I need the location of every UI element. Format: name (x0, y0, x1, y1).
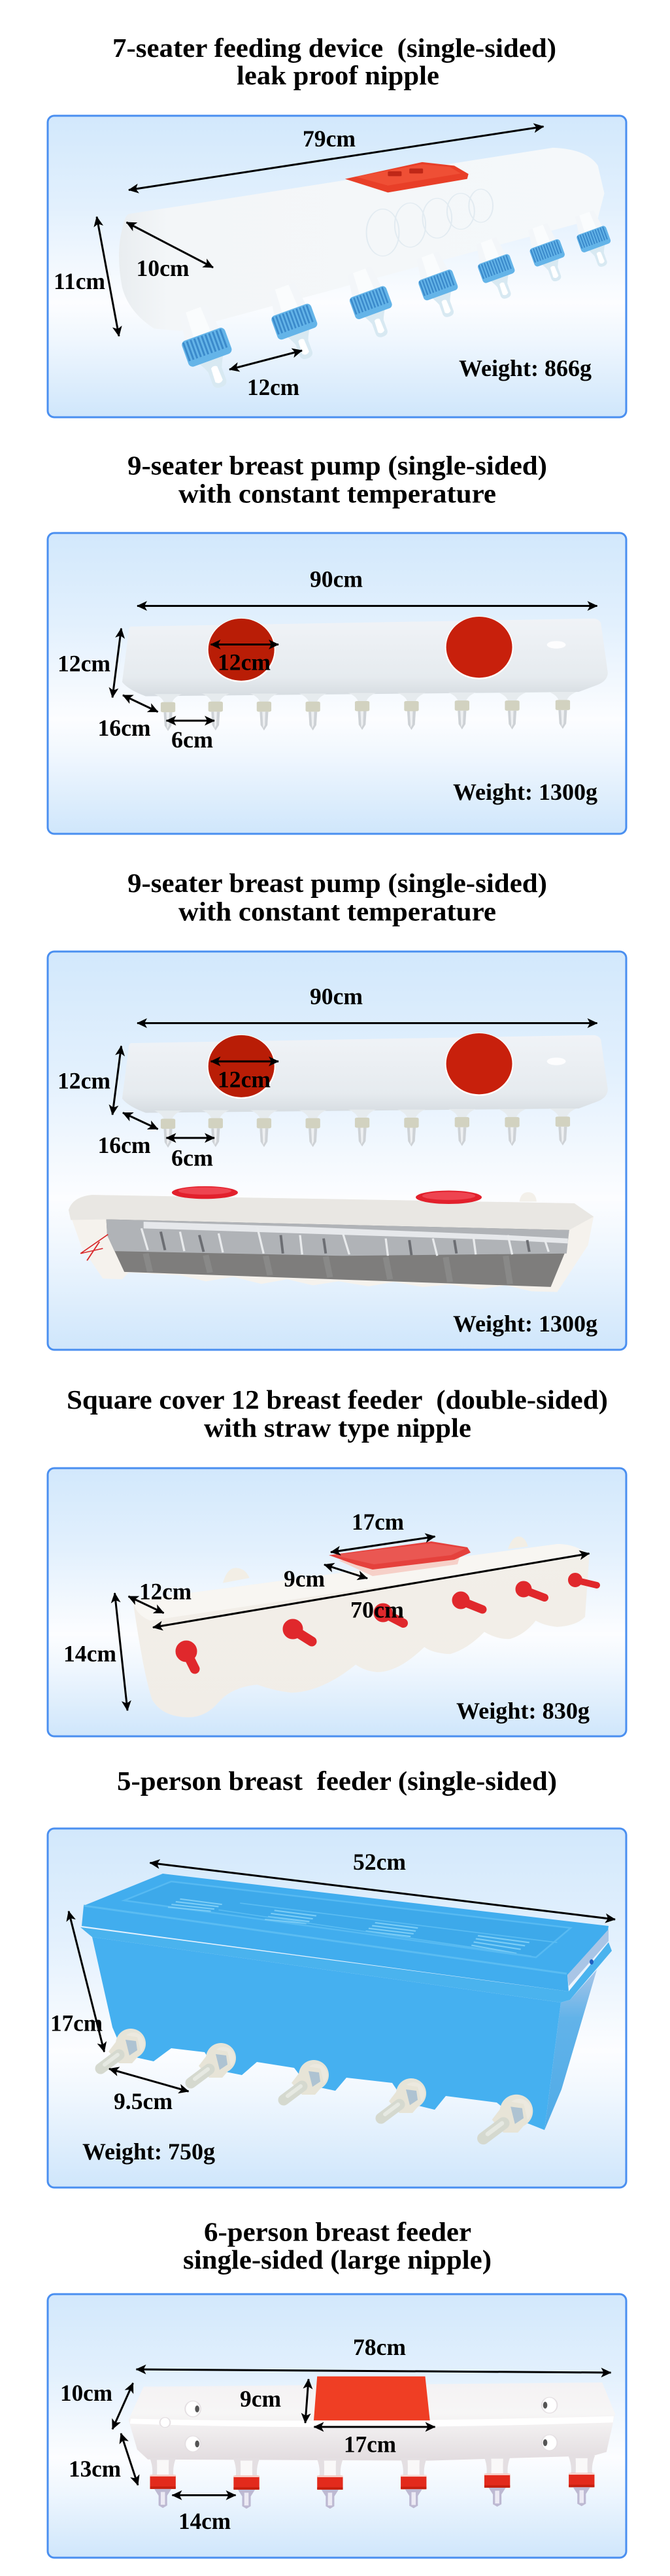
dimension: 9.5cm: 9.5cm (114, 2088, 173, 2114)
dimension: 13cm: 13cm (69, 2456, 121, 2482)
dimension: 17cm (331, 1509, 435, 1553)
dimension: 10cm: 10cm (60, 2380, 112, 2406)
dimension: 12cm: 12cm (139, 1579, 192, 1605)
title (183, 2217, 492, 2275)
dimension: 17cm: 17cm (50, 2010, 103, 2036)
dimension: 6cm (166, 1138, 214, 1171)
section: square cover 12 breast feeder (48, 1384, 626, 1736)
product: white feeder with red nipples (129, 2377, 615, 2509)
title: 9-seater breast pump (single-sided) (127, 450, 547, 480)
product: 9-seater pump front view (122, 1033, 608, 1148)
dimension: 90cm: 90cm (310, 984, 363, 1010)
dimension: 11cm (54, 217, 119, 336)
dimension: 12cm height (58, 1046, 122, 1114)
product: cream double-sided feeder (133, 1537, 597, 1717)
dimension: 13cm (69, 2433, 138, 2485)
dimension: 9cm: 9cm (240, 2386, 281, 2412)
dimension: 9cm (240, 2379, 309, 2423)
dimension: 10cm (60, 2380, 133, 2429)
section: 6-person breast feeder (48, 2217, 626, 2558)
weight label: Weight: 1300g (453, 779, 597, 805)
product: 9-seater pump (122, 616, 608, 731)
title: with constant temperature (178, 896, 496, 926)
section: 5-person breast feeder (48, 1766, 626, 2188)
dimension: 70cm: 70cm (350, 1597, 404, 1623)
dimension: 90cm: 90cm (310, 566, 363, 592)
dimension: 78cm (136, 2334, 611, 2373)
product: blue feeder box (80, 1874, 612, 2138)
dimension: 78cm: 78cm (353, 2334, 406, 2360)
section: 7-seater feeding device (48, 33, 626, 417)
dimension: 9.5cm (109, 2069, 188, 2114)
title: 6-person breast feeder (204, 2217, 471, 2247)
dimension: 12cm (229, 351, 302, 400)
dimension: 16cm (98, 1113, 158, 1158)
panel (48, 952, 626, 1350)
title: single-sided (large nipple) (183, 2244, 492, 2275)
dimension: 17cm: 17cm (344, 2431, 396, 2458)
dimension: 14cm: 14cm (63, 1640, 116, 1666)
dimension: 79cm (129, 126, 544, 190)
title: with straw type nipple (204, 1413, 471, 1443)
dimension: 12cm lid: 12cm (218, 1066, 271, 1092)
title: leak proof nipple (237, 60, 439, 90)
weight label: Weight: 830g (456, 1698, 590, 1724)
section: 9-seater breast pump with foil view (48, 868, 626, 1350)
panel (48, 1468, 626, 1736)
dimension: 16cm: 16cm (98, 1132, 151, 1158)
dimension: 52cm (150, 1849, 615, 1919)
dimension: 16cm: 16cm (98, 715, 151, 741)
product: white 7-seater feeder (119, 148, 618, 395)
dimension: 17cm (50, 1911, 105, 2052)
dimension: 70cm (153, 1554, 590, 1627)
panel (48, 1829, 626, 2188)
dimension: 12cm lid (210, 645, 278, 675)
panel (48, 533, 626, 834)
dimension: 79cm: 79cm (303, 126, 356, 152)
dimension: 10cm (127, 222, 213, 281)
title: 5-person breast feeder (single-sided) (117, 1766, 557, 1796)
dimension: 14cm (173, 2496, 235, 2534)
title: 9-seater breast pump (single-sided) (127, 868, 547, 898)
dimension: 12cm lid: 12cm (218, 649, 271, 675)
dimension: 12cm (128, 1579, 192, 1613)
dimension: 12cm height (58, 628, 122, 697)
weight label: Weight: 1300g (453, 1311, 597, 1337)
weight label: Weight: 866g (459, 355, 592, 381)
title: 7-seater feeding device (single-sided) (112, 33, 556, 63)
dimension: 14cm (63, 1593, 127, 1711)
dimension: 12cm height: 12cm (58, 650, 110, 676)
dimension: 6cm: 6cm (171, 727, 213, 753)
title (127, 450, 547, 509)
title: Square cover 12 breast feeder (double-sided) (67, 1384, 608, 1415)
dimension: 10cm: 10cm (136, 255, 190, 281)
dimension: 16cm (98, 695, 158, 741)
product: pump rear view with heating foil (69, 1186, 594, 1292)
panel (48, 2294, 626, 2558)
weight label: Weight: 750g (82, 2138, 215, 2165)
title (127, 868, 547, 926)
title: with constant temperature (178, 479, 496, 509)
dimension: 12cm: 12cm (247, 374, 299, 400)
dimension: 17cm: 17cm (352, 1509, 404, 1535)
title (112, 33, 556, 90)
dimension: 6cm: 6cm (171, 1144, 213, 1171)
dimension: 9cm (284, 1564, 367, 1592)
dimension: 14cm: 14cm (178, 2508, 231, 2534)
dimension: 52cm: 52cm (353, 1849, 406, 1875)
title (67, 1384, 608, 1443)
dimension: 11cm: 11cm (54, 268, 105, 294)
panel (48, 116, 626, 417)
dimension: 12cm lid (210, 1061, 278, 1092)
dimension: 9cm: 9cm (284, 1566, 325, 1592)
dimension: 12cm height: 12cm (58, 1067, 110, 1093)
section: 9-seater breast pump (48, 450, 626, 834)
